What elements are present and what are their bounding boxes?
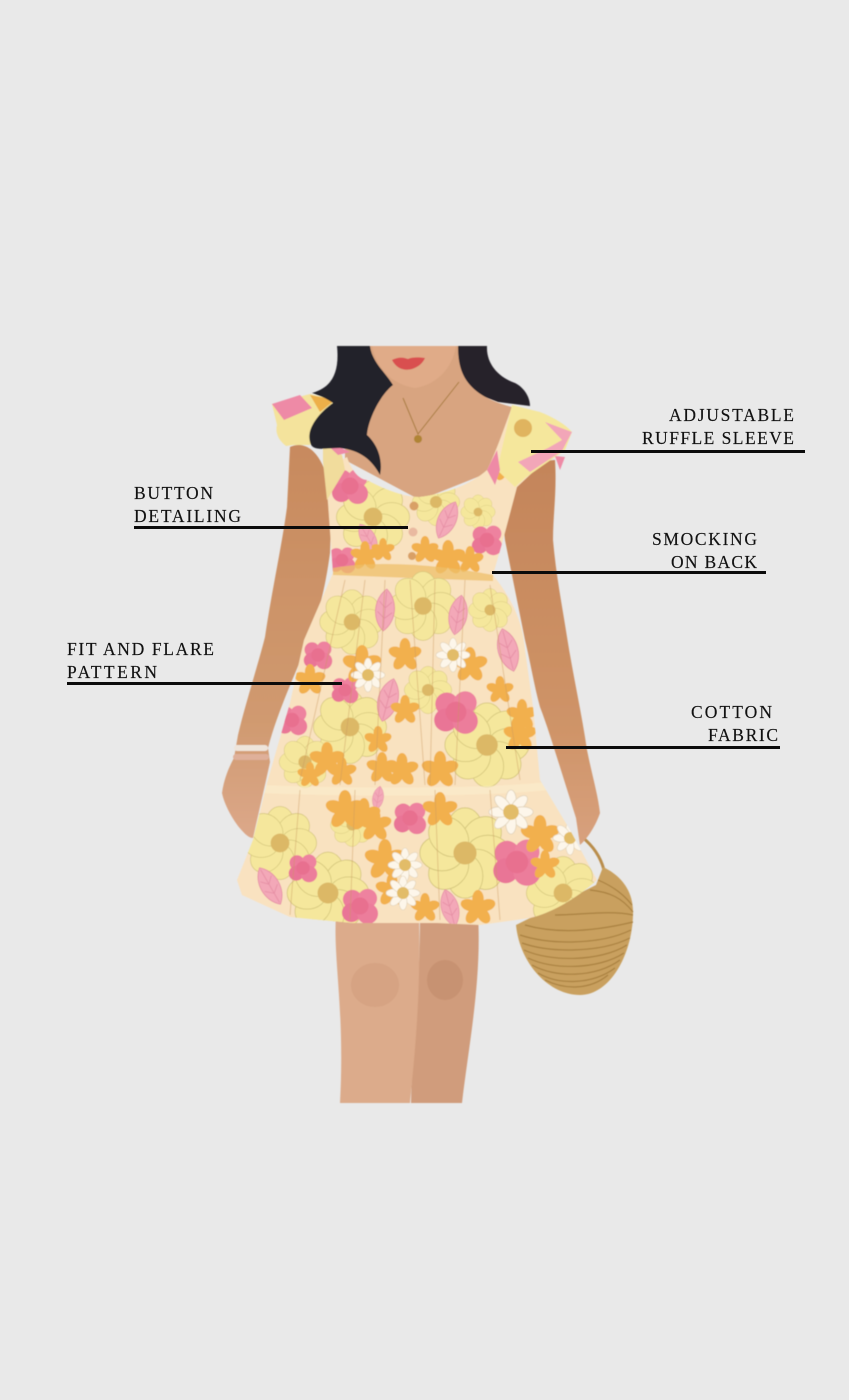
callout: button detailing: BUTTON xyxy=(134,483,213,503)
waistband xyxy=(333,564,493,581)
callout: cotton fabric: COTTON xyxy=(691,702,772,722)
face, neck and chest xyxy=(345,346,512,500)
chin and lower face xyxy=(372,346,456,388)
arm: left xyxy=(222,445,332,838)
callout: smocking on back xyxy=(492,529,766,574)
necklace xyxy=(403,382,459,443)
lips xyxy=(392,357,425,370)
dress xyxy=(225,400,605,934)
legs xyxy=(336,915,479,1103)
callout: fit and flare pattern xyxy=(67,639,342,685)
skirt pleats xyxy=(290,580,520,920)
hair behind shoulders xyxy=(440,346,530,406)
tier seam xyxy=(298,784,544,794)
callout: cotton fabric: FABRIC xyxy=(708,725,778,745)
callout: fit and flare pattern: FIT AND FLARE xyxy=(67,639,214,659)
callout: button detailing: DETAILING xyxy=(134,506,241,526)
upper skirt print xyxy=(277,572,539,789)
sleeve: right ruffle xyxy=(487,405,572,487)
callout: adjustable ruffle sleeve xyxy=(531,405,805,453)
callout: adjustable ruffle sleeve: ADJUSTABLE xyxy=(669,405,794,425)
lower skirt print xyxy=(243,785,600,934)
callout: button detailing xyxy=(134,483,408,529)
basket xyxy=(516,837,633,995)
callout: adjustable ruffle sleeve: RUFFLE SLEEVE xyxy=(642,428,794,448)
infographic canvas xyxy=(67,345,805,1104)
arm: right xyxy=(498,460,600,845)
callout: cotton fabric xyxy=(506,702,780,749)
callout: smocking on back: SMOCKING xyxy=(652,529,757,549)
callout: smocking on back: ON BACK xyxy=(671,552,757,572)
bodice patches xyxy=(330,470,505,574)
bracelets xyxy=(233,745,269,760)
hair front lock xyxy=(309,346,393,475)
sleeve: left ruffle xyxy=(272,394,350,500)
callout: fit and flare pattern: PATTERN xyxy=(67,662,157,682)
buttons xyxy=(408,502,418,560)
model figure xyxy=(222,346,633,1103)
